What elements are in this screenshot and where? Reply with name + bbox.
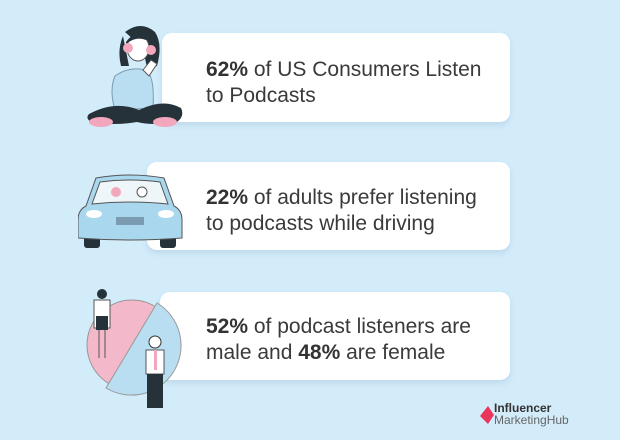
text 2 [206, 186, 477, 235]
text 2: to podcasts while driving [206, 212, 435, 235]
logo: MarketingHub [494, 413, 569, 427]
text 3 [206, 315, 471, 364]
icon: car [78, 174, 182, 248]
text 1: 62% of US Consumers Listen [206, 58, 481, 81]
card 2 [147, 162, 510, 250]
logo: Influencer [494, 401, 551, 415]
text 3: 52% of podcast listeners are [206, 315, 471, 338]
icon: woman with headphones [87, 26, 182, 127]
text 2: 22% of adults prefer listening [206, 186, 477, 209]
text 1: to Podcasts [206, 84, 316, 107]
logo [480, 401, 569, 427]
text 3: male and 48% are female [206, 341, 445, 364]
text 1 [206, 58, 481, 107]
card 3 [160, 292, 510, 380]
card 1 [162, 33, 510, 122]
icon: pie chart with people [86, 289, 182, 408]
